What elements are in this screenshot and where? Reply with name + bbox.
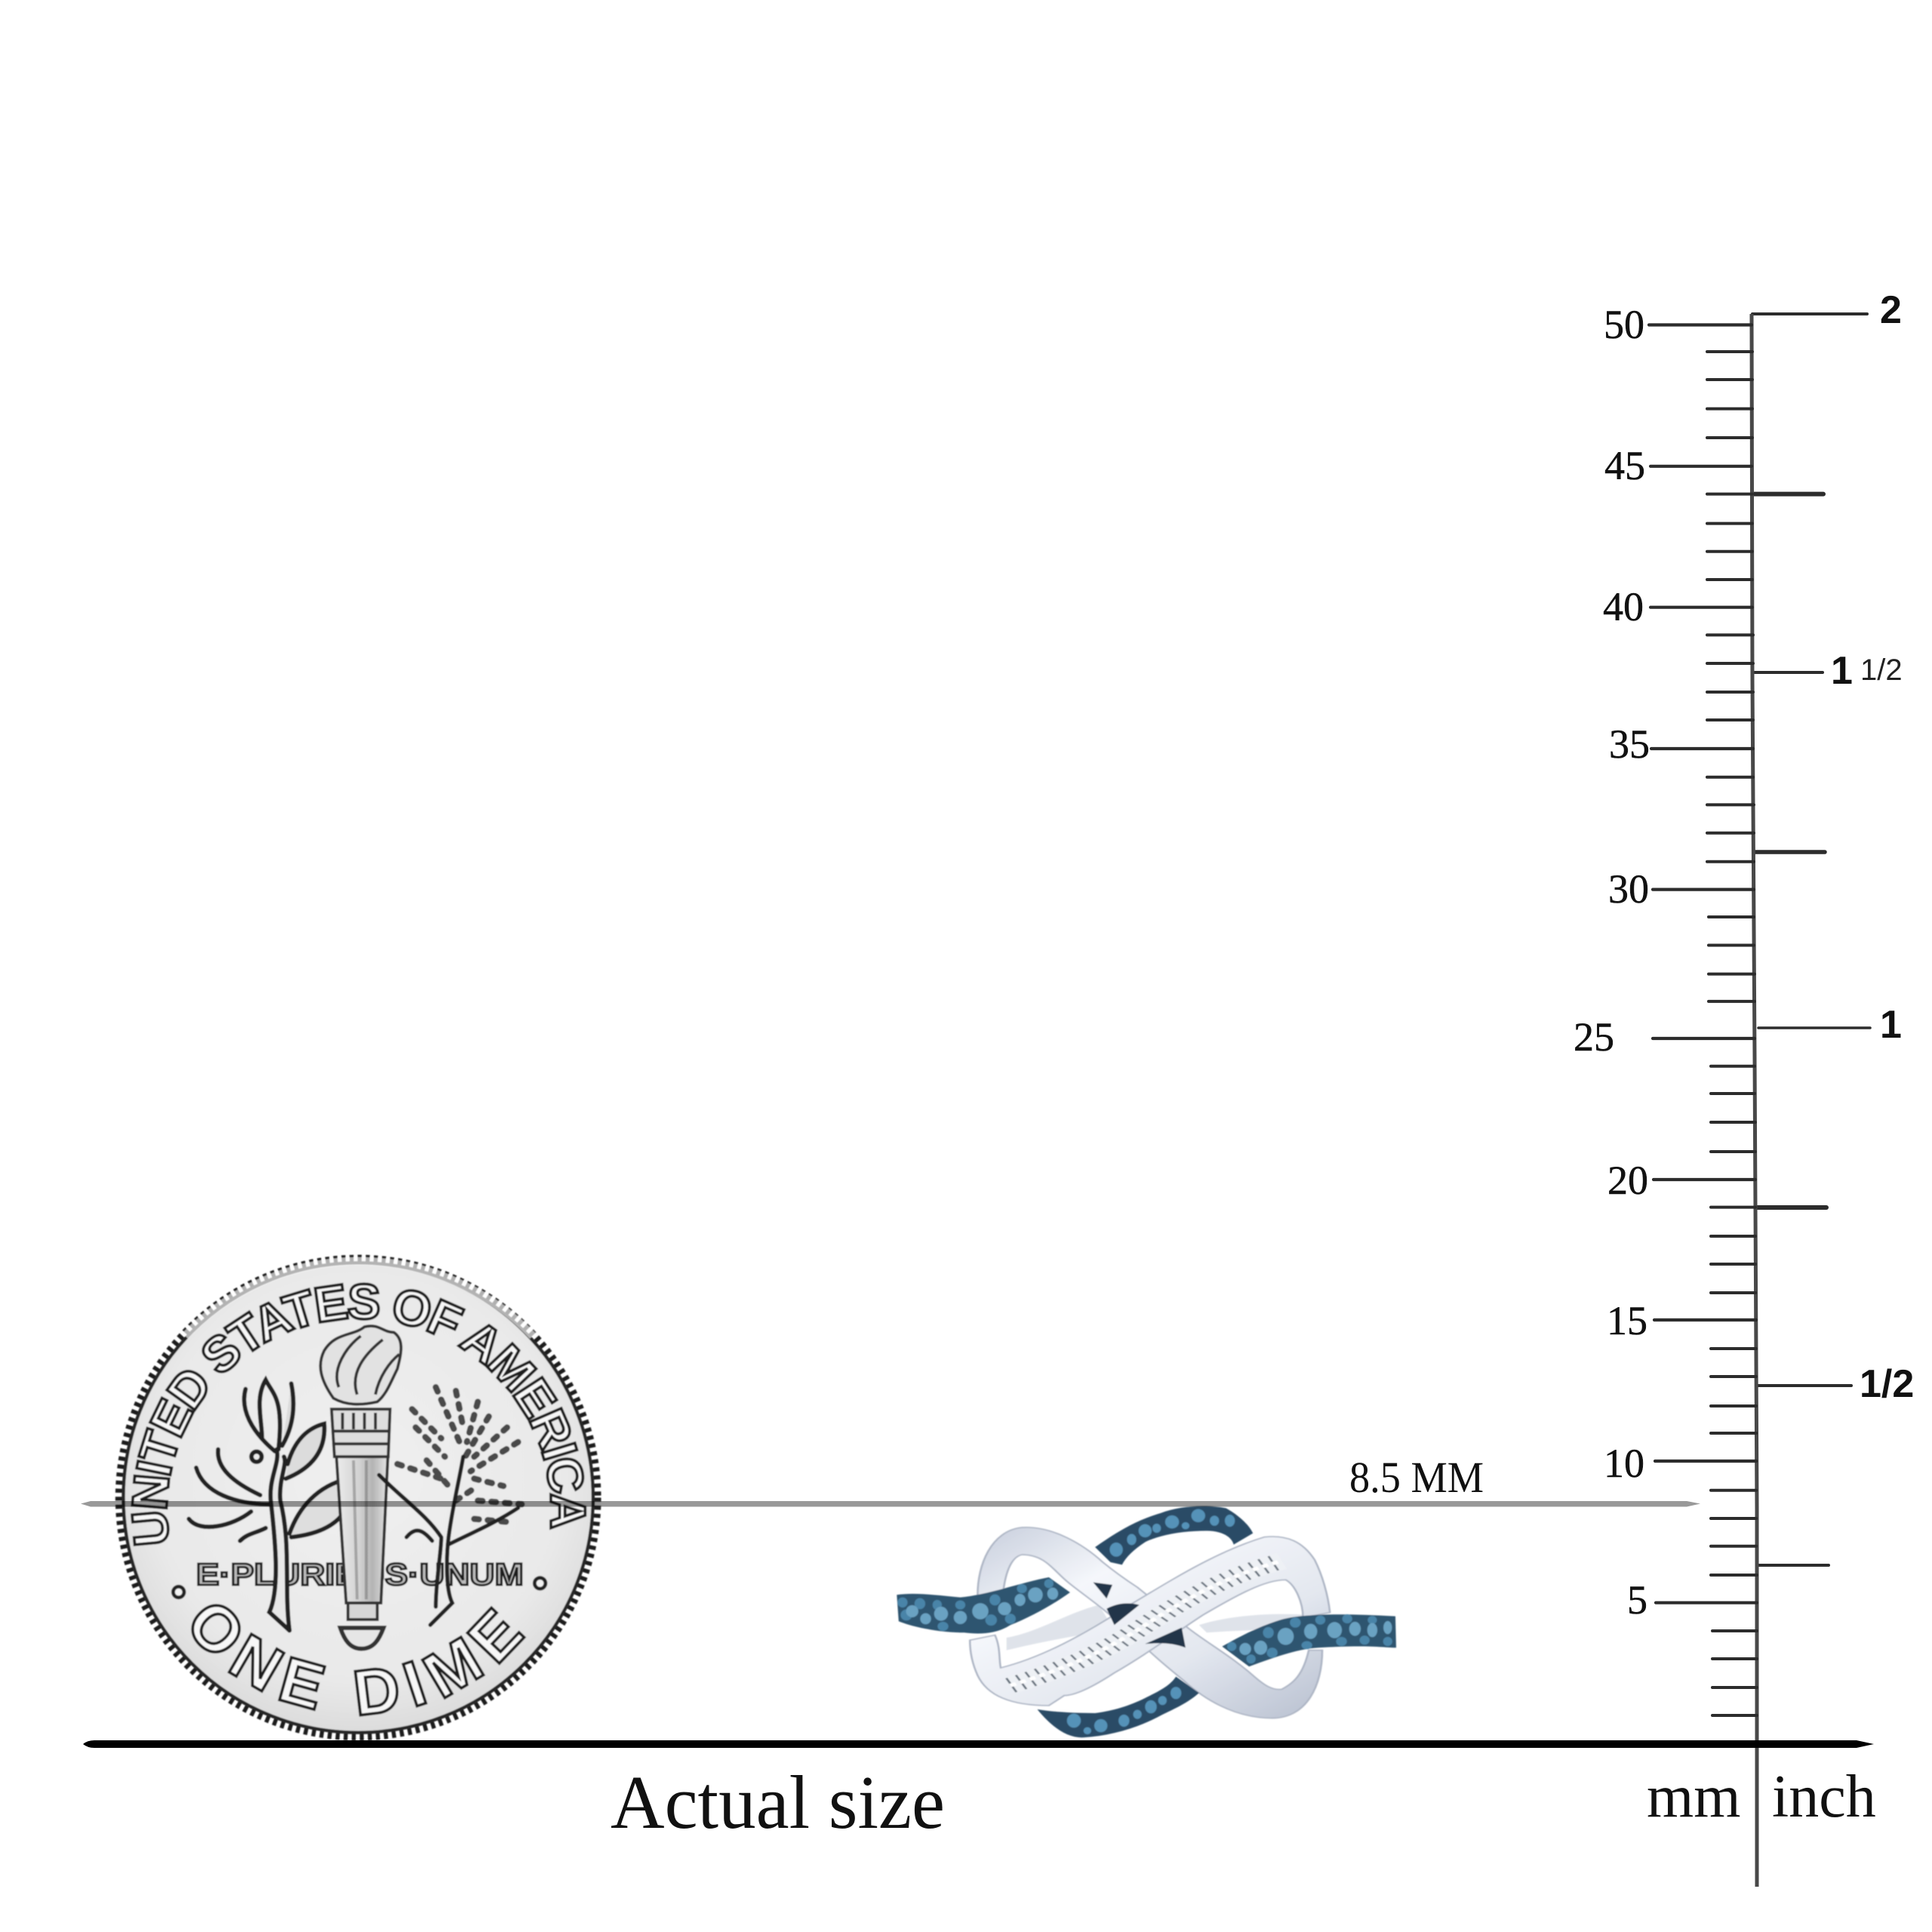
inch unit label: inch (1772, 1764, 1876, 1830)
ruler axis (1752, 314, 1757, 1887)
baguette highlights (1011, 1561, 1281, 1685)
millimetre labels: 20 (1607, 1158, 1648, 1203)
dime coin (115, 1254, 602, 1740)
ring rear shank (1007, 1605, 1307, 1651)
torch shaft flutes (353, 1460, 366, 1599)
baguette channel (1011, 1561, 1281, 1685)
height label: 8.5 MM (1349, 1453, 1484, 1502)
millimetre labels: 5 (1627, 1577, 1647, 1623)
torch bands (333, 1413, 389, 1444)
ring (897, 1506, 1396, 1737)
torch flame strokes (337, 1336, 399, 1395)
torch (321, 1326, 401, 1649)
millimetre labels: 40 (1603, 584, 1644, 629)
coin reeded edge (119, 1259, 598, 1737)
actual size caption: Actual size (611, 1760, 945, 1844)
coin face (123, 1263, 593, 1733)
black baseline (83, 1740, 1874, 1748)
torch base (348, 1603, 377, 1620)
ring polished shadows (1093, 1583, 1186, 1647)
inch labels: 1 (1831, 649, 1853, 693)
gray 8.5 mm height line (81, 1501, 1700, 1506)
bottom blue arc (1037, 1677, 1199, 1737)
millimetre labels: 45 (1604, 443, 1645, 488)
millimetre labels: 15 (1607, 1298, 1647, 1343)
mm major ticks (1649, 325, 1757, 1603)
olive branch (189, 1380, 349, 1630)
top blue arc (1095, 1506, 1253, 1564)
inch labels: 1/2 (1860, 654, 1903, 687)
oak leaves (398, 1387, 521, 1522)
coin legend: one dime: ONE DIME (190, 1603, 527, 1718)
mm unit label: mm (1647, 1764, 1740, 1830)
torch flame (321, 1326, 401, 1404)
torch head (331, 1409, 390, 1457)
mm minor ticks (1707, 352, 1757, 1715)
inch labels: 1 (1880, 1003, 1902, 1047)
millimetre labels: 30 (1608, 866, 1649, 912)
millimetre labels: 10 (1604, 1441, 1644, 1486)
inch labels: 1/2 (1860, 1362, 1914, 1406)
inch labels: 2 (1880, 288, 1902, 332)
coin motto: E·PLURIBUS·UNUM (196, 1557, 524, 1592)
ring band B (970, 1537, 1330, 1706)
millimetre labels (1574, 302, 1650, 1623)
torch cap (340, 1628, 383, 1649)
left blue shank (897, 1577, 1070, 1634)
millimetre labels: 50 (1604, 302, 1644, 347)
inch-side ticks (1752, 314, 1870, 1565)
millimetre labels: 35 (1609, 721, 1650, 767)
oak branch (379, 1387, 521, 1625)
coin legend: united states of america: UNITED STATES OF AMERICA (130, 1281, 587, 1547)
coin dots (173, 1578, 546, 1598)
ring band A (977, 1527, 1322, 1718)
baguette divisions (1011, 1561, 1281, 1685)
torch shaft (336, 1450, 388, 1603)
millimetre labels: 25 (1574, 1014, 1614, 1060)
right blue shank (1222, 1614, 1396, 1666)
inch labels (1831, 288, 1914, 1406)
coin edge highlight (185, 1261, 533, 1336)
